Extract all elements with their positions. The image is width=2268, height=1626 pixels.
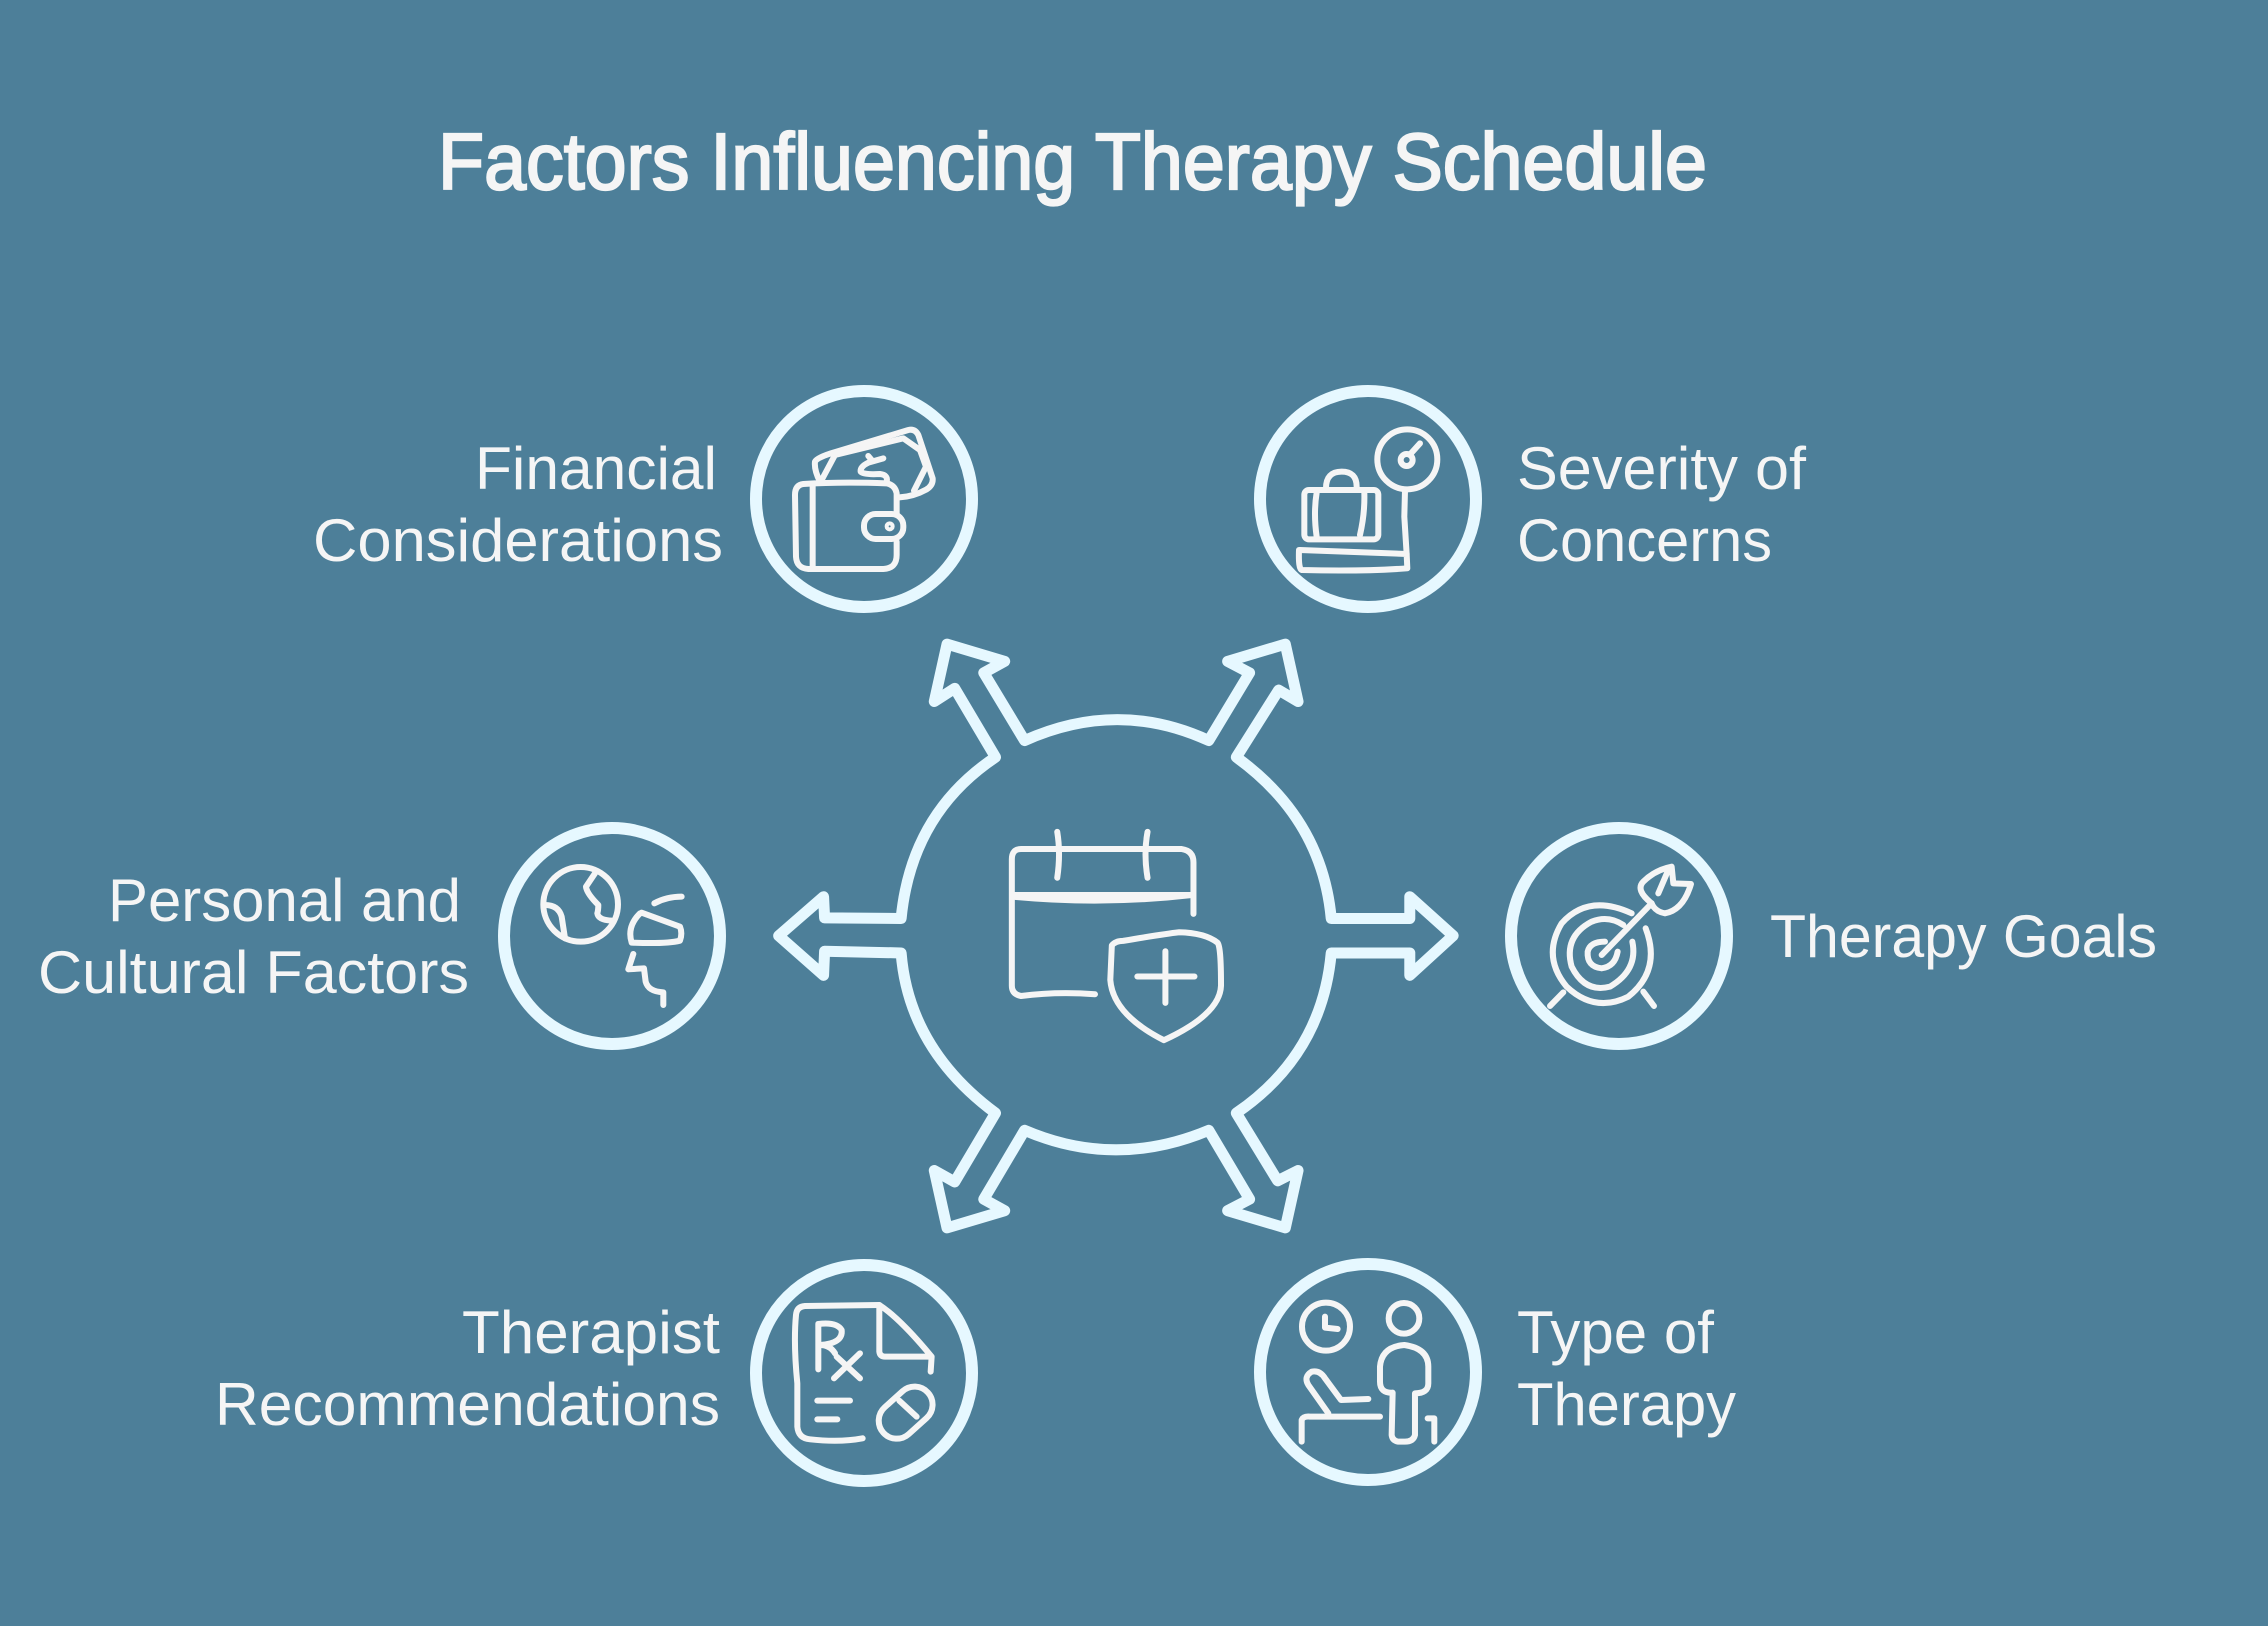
hub outline with arrows bbox=[779, 644, 1453, 1228]
label: Considerations bbox=[313, 507, 723, 574]
ring bbox=[1511, 828, 1727, 1044]
label: Therapist bbox=[462, 1299, 720, 1366]
label bbox=[313, 435, 723, 574]
icon: target with arrow bbox=[1550, 867, 1691, 1006]
label bbox=[1517, 1299, 1736, 1438]
factor: type of therapy bbox=[1260, 1264, 1736, 1480]
label: Cultural Factors bbox=[38, 939, 469, 1006]
ring bbox=[1260, 391, 1476, 607]
ring bbox=[756, 1265, 972, 1481]
ring bbox=[756, 391, 972, 607]
icon: globe and head bbox=[543, 867, 682, 1005]
label: Therapy Goals bbox=[1770, 903, 2157, 970]
ring bbox=[1260, 1264, 1476, 1480]
label bbox=[38, 867, 469, 1006]
label: Concerns bbox=[1517, 507, 1772, 574]
factor: therapy goals bbox=[1511, 828, 2157, 1044]
icon: calendar with medical shield bbox=[1012, 832, 1221, 1040]
factor: therapist recommendations bbox=[215, 1265, 972, 1481]
title: Factors Influencing Therapy Schedule bbox=[438, 117, 1707, 206]
icon: therapist, couch and clock bbox=[1302, 1303, 1434, 1442]
factor: personal and cultural factors bbox=[38, 828, 720, 1044]
central hub with six outward arrows bbox=[779, 644, 1453, 1228]
label bbox=[1517, 435, 1806, 574]
label: Recommendations bbox=[215, 1371, 720, 1438]
factor: financial considerations bbox=[313, 391, 972, 607]
icon: wallet with cash bbox=[795, 430, 933, 569]
factor: severity of concerns bbox=[1260, 391, 1806, 607]
icon: luggage scale bbox=[1299, 429, 1437, 571]
label: Severity of bbox=[1517, 435, 1806, 502]
label: Therapy bbox=[1517, 1371, 1736, 1438]
label: Financial bbox=[475, 435, 717, 502]
icon: prescription and pill bbox=[795, 1305, 940, 1446]
label: Type of bbox=[1517, 1299, 1714, 1366]
label bbox=[215, 1299, 720, 1438]
ring bbox=[504, 828, 720, 1044]
label: Personal and bbox=[108, 867, 461, 934]
